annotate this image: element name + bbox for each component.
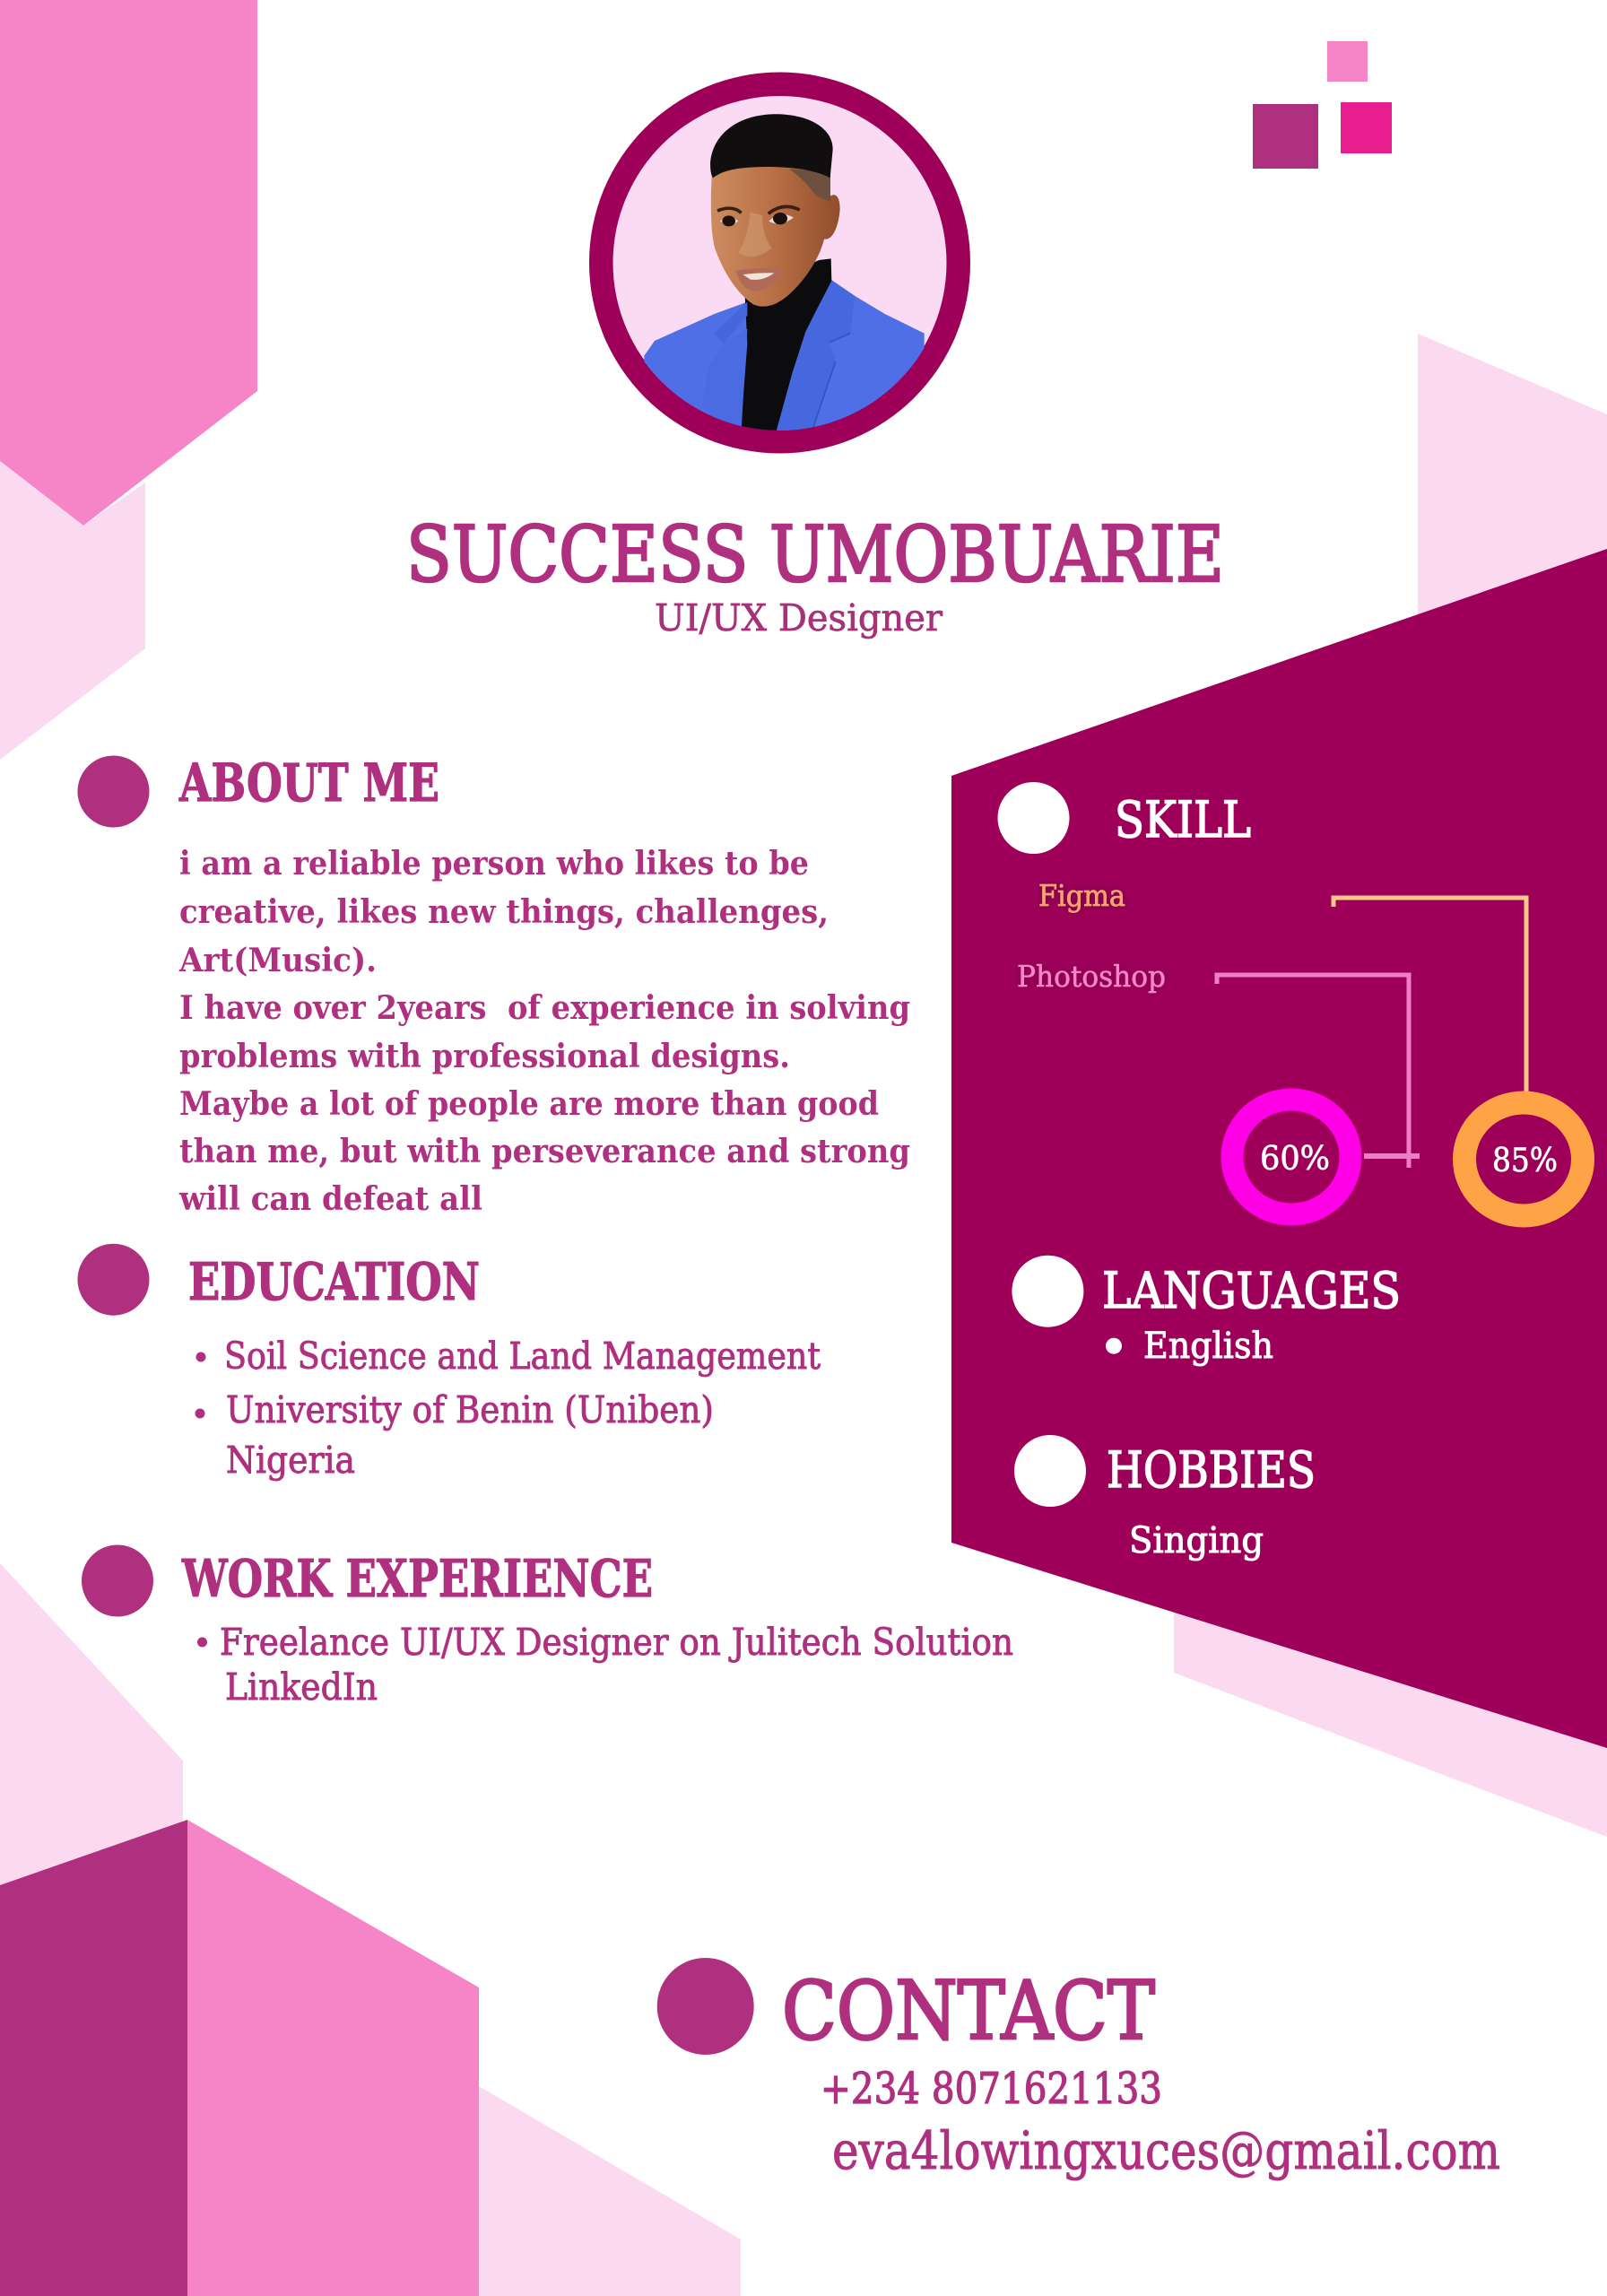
list: languages: English	[1143, 1326, 1273, 1367]
connector: figma to 85% ring	[1333, 898, 1526, 1091]
section: work experience	[82, 1544, 1013, 1709]
text block: about me body: creative, likes new things, challenges,	[179, 893, 829, 931]
heading: hobbies: HOBBIES	[1107, 1441, 1316, 1499]
section: languages	[1012, 1256, 1401, 1367]
icon: hobbies bullet	[1014, 1435, 1086, 1507]
title: SUCCESS UMOBUARIE	[406, 510, 1224, 600]
section: skill	[997, 782, 1583, 1216]
text: phone: +234 8071621133	[821, 2064, 1162, 2114]
text block: about me body	[178, 845, 910, 1218]
chart: 60% ring: 60%	[1260, 1141, 1330, 1178]
background shape: top-left hexagon	[0, 0, 257, 526]
decorative squares icon	[1253, 41, 1392, 169]
section: about me	[77, 752, 910, 1218]
icon: work experience bullet	[82, 1544, 153, 1616]
text block: about me body: Art(Music).	[178, 942, 377, 979]
heading: skill: SKILL	[1115, 791, 1251, 848]
list: education items: Soil Science and Land Management	[224, 1335, 821, 1378]
icon: education bullet	[77, 1244, 149, 1316]
label: photoshop: Photoshop	[1017, 959, 1166, 994]
text block: about me body: i am a reliable person who likes to be	[179, 845, 809, 883]
background shape: right light block	[1418, 334, 1607, 700]
background shape: bottom-left medium hexagon	[187, 1820, 479, 2296]
section: contact	[657, 1958, 1500, 2181]
chart: 85% ring: 85%	[1492, 1143, 1558, 1179]
panel: skills and languages background	[951, 549, 1607, 1748]
text block: about me body: will can defeat all	[178, 1180, 482, 1218]
label: figma: Figma	[1038, 878, 1125, 913]
icon: about me bullet	[77, 755, 149, 827]
profile photo	[589, 72, 970, 464]
text block: about me body: Maybe a lot of people are more than good	[179, 1085, 879, 1123]
text: email: eva4lowingxuces@gmail.com	[832, 2120, 1500, 2181]
background shape: top-left light band	[0, 461, 145, 760]
section: education	[77, 1244, 821, 1482]
background shape: light band below panel	[1174, 1570, 1607, 1837]
list: work experience items: LinkedIn	[225, 1665, 378, 1709]
text block: about me body: than me, but with perseverance and strong	[179, 1133, 910, 1170]
list: education items: University of Benin (Uniben)	[226, 1388, 714, 1431]
chart: 60% ring	[1232, 1100, 1351, 1214]
background shape: bottom-left light triangle	[0, 1563, 183, 1892]
icon: languages bullet	[1012, 1256, 1083, 1327]
heading: education: EDUCATION	[188, 1252, 480, 1312]
chart: 85% ring	[1464, 1103, 1583, 1216]
heading: work experience: WORK EXPERIENCE	[181, 1549, 653, 1609]
text block: about me body: I have over 2years of experience in solving	[179, 989, 910, 1027]
connector: photoshop to 60% ring	[1217, 975, 1420, 1168]
background shape: bottom-left dark block	[0, 1820, 187, 2296]
icon: contact bullet	[657, 1958, 754, 2055]
subtitle: UI/UX Designer	[655, 596, 942, 639]
heading: contact: CONTACT	[782, 1964, 1155, 2058]
section: hobbies	[1014, 1435, 1316, 1561]
list: education items: Nigeria	[226, 1439, 355, 1482]
text: hobbies item: Singing	[1129, 1520, 1264, 1561]
heading: about me: ABOUT ME	[178, 752, 439, 813]
heading: languages: LANGUAGES	[1102, 1262, 1401, 1319]
text block: about me body: problems with professional designs.	[179, 1038, 790, 1075]
list: work experience items	[197, 1621, 1013, 1709]
icon: skill bullet	[997, 782, 1069, 854]
background shape: bottom-right light block	[479, 2086, 741, 2296]
list: education items	[195, 1335, 821, 1482]
list: work experience items: Freelance UI/UX Designer on Julitech Solution	[220, 1621, 1013, 1664]
